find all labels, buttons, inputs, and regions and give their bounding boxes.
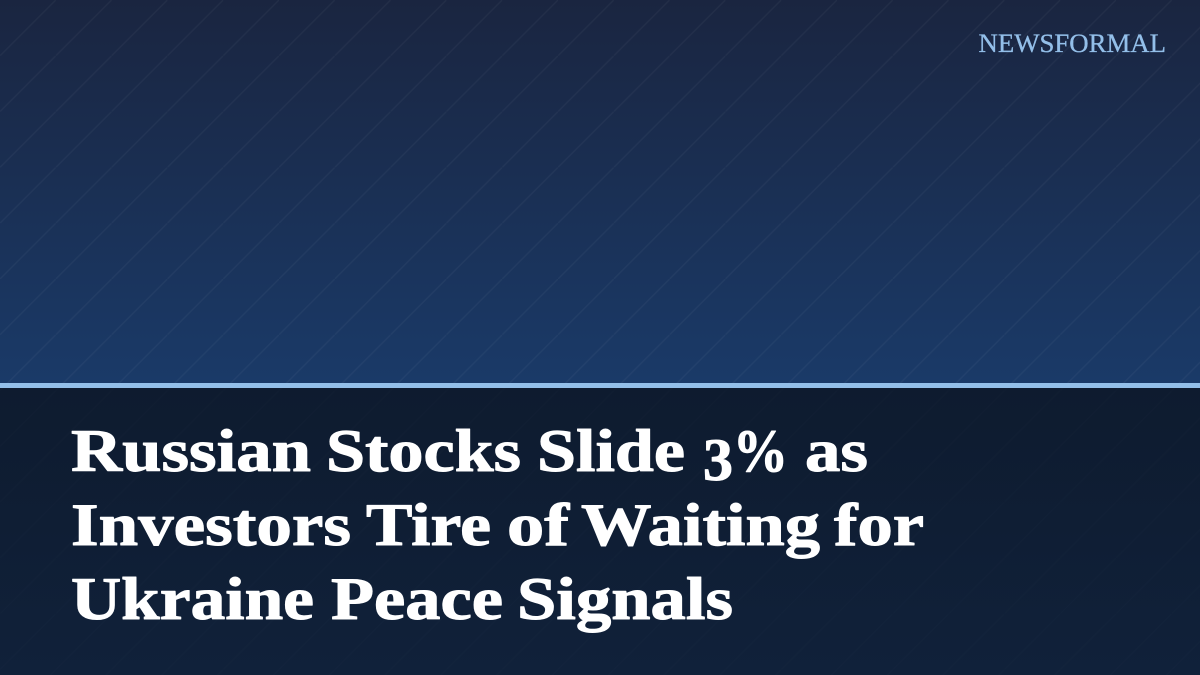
headline: Slide	[537, 418, 685, 484]
headline: Investors	[71, 492, 351, 558]
panel: upper image area	[0, 0, 1200, 383]
headline: Tire	[366, 492, 491, 558]
headline: Stocks	[326, 418, 521, 484]
headline: %	[733, 418, 788, 484]
accent band	[0, 383, 1200, 388]
headline: as	[805, 418, 868, 484]
panel: lower headline area	[0, 388, 1200, 675]
headline: of	[507, 492, 570, 558]
headline: for	[834, 492, 924, 558]
headline: Signals	[517, 566, 733, 632]
brand label: NEWSFORMAL	[978, 29, 1166, 58]
headline: Russian	[71, 418, 311, 484]
headline: 3	[703, 427, 733, 493]
headline	[71, 418, 924, 632]
headline: Waiting	[581, 492, 820, 558]
headline: Ukraine	[71, 566, 314, 632]
headline: Peace	[331, 566, 503, 632]
